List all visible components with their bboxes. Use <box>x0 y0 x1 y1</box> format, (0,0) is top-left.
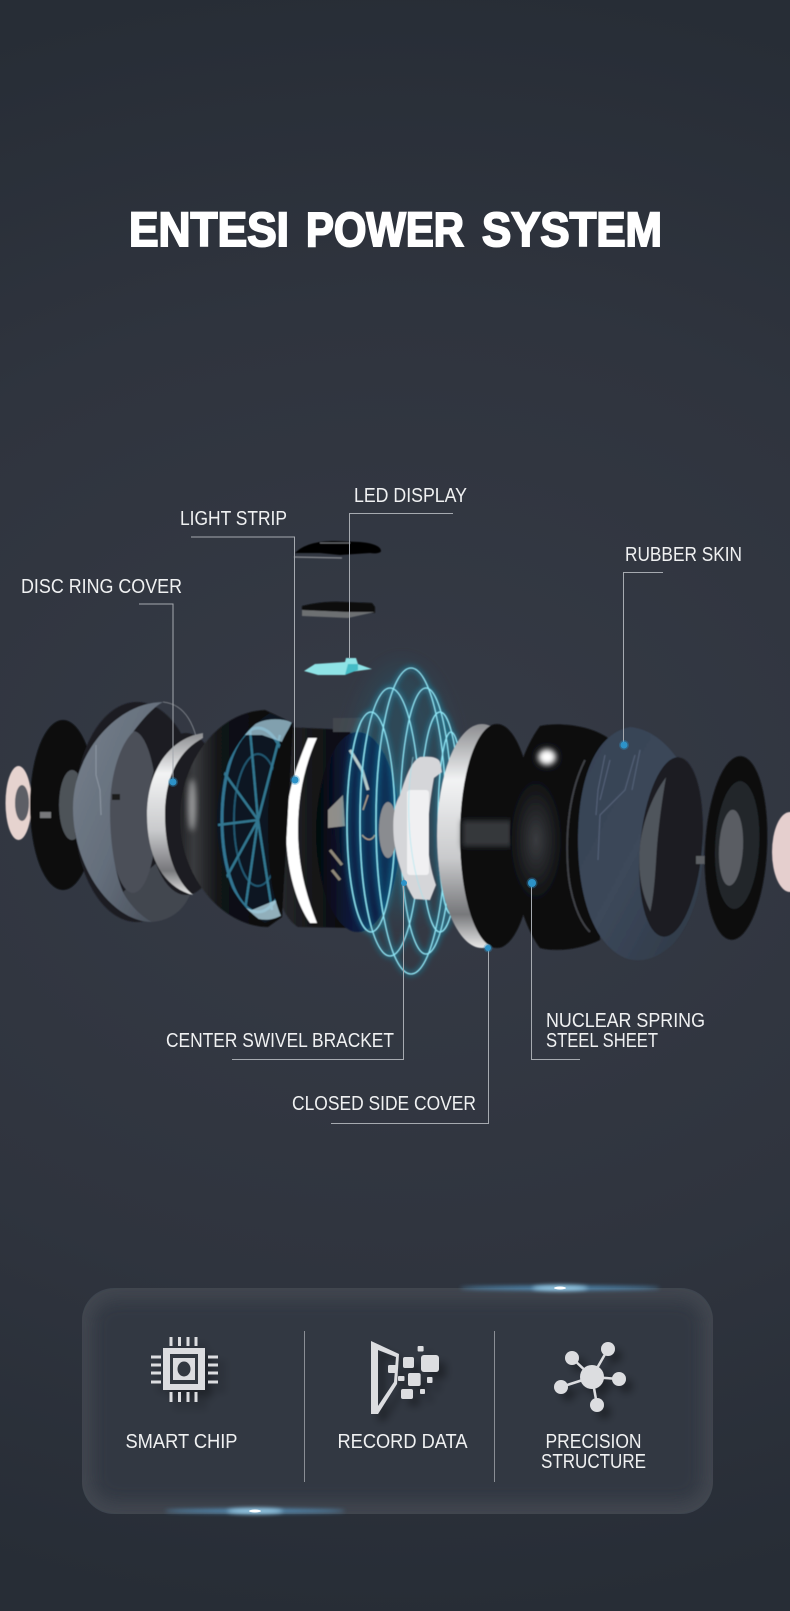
divider left <box>304 1331 305 1482</box>
callout: nuclear spring steel sheet <box>528 879 705 1060</box>
callout: disc ring cover <box>21 576 182 786</box>
title <box>129 204 662 257</box>
callout: closed side cover: CLOSED SIDE COVER <box>292 1093 476 1115</box>
left disc ring <box>30 720 96 890</box>
icon: record data <box>371 1341 439 1414</box>
glow: bottom edge <box>165 1508 345 1514</box>
right end cap <box>772 812 790 892</box>
title: SYSTEM <box>482 204 662 257</box>
callout: center swivel bracket <box>166 880 407 1060</box>
callout: rubber skin <box>620 544 742 748</box>
callout: nuclear spring steel sheet: STEEL SHEET <box>546 1030 658 1052</box>
right disc ring <box>696 755 772 941</box>
LED display modules <box>294 541 381 675</box>
panel card <box>82 1288 713 1514</box>
silver ring: disc ring cover <box>147 733 224 895</box>
callout: light strip <box>180 508 298 784</box>
exploded product view <box>6 541 790 974</box>
label: precision structure <box>541 1431 646 1473</box>
callout: LED display <box>350 485 467 658</box>
title: POWER <box>306 204 464 257</box>
divider right <box>494 1331 495 1482</box>
icon: network structure <box>554 1342 626 1412</box>
blue energy rings <box>347 665 464 974</box>
dome with blue mechanical core <box>180 708 295 928</box>
callout: LED display: LED DISPLAY <box>354 485 467 507</box>
module: top cover <box>294 541 381 558</box>
callout: nuclear spring steel sheet: NUCLEAR SPRING <box>546 1010 705 1032</box>
label: precision structure: PRECISION <box>546 1431 642 1453</box>
left rubber skin <box>73 702 200 922</box>
nuclear spring steel dome <box>510 724 608 950</box>
closed side cover <box>437 724 534 948</box>
callout: disc ring cover: DISC RING COVER <box>21 576 182 598</box>
module: cyan board <box>304 658 372 675</box>
label: precision structure: STRUCTURE <box>541 1451 646 1473</box>
mechanical core <box>215 708 295 928</box>
callout: center swivel bracket: CENTER SWIVEL BRACKET <box>166 1030 394 1052</box>
label: smart chip: SMART CHIP <box>126 1431 238 1453</box>
callout: rubber skin: RUBBER SKIN <box>625 544 742 566</box>
callout: closed side cover <box>292 945 491 1124</box>
right rubber skin <box>578 727 710 960</box>
glow: top edge <box>460 1285 660 1291</box>
light strip <box>286 738 317 923</box>
title: ENTESI <box>129 204 289 257</box>
panel: features <box>82 1285 713 1514</box>
module: mid housing <box>302 602 375 618</box>
center swivel bracket <box>379 757 442 900</box>
navy motor body <box>316 732 400 932</box>
icon: chip <box>151 1337 218 1402</box>
callout: light strip: LIGHT STRIP <box>180 508 287 530</box>
inner motor cylinder and light strip <box>268 718 362 928</box>
label: record data: RECORD DATA <box>338 1431 468 1453</box>
left end cap <box>6 766 32 840</box>
